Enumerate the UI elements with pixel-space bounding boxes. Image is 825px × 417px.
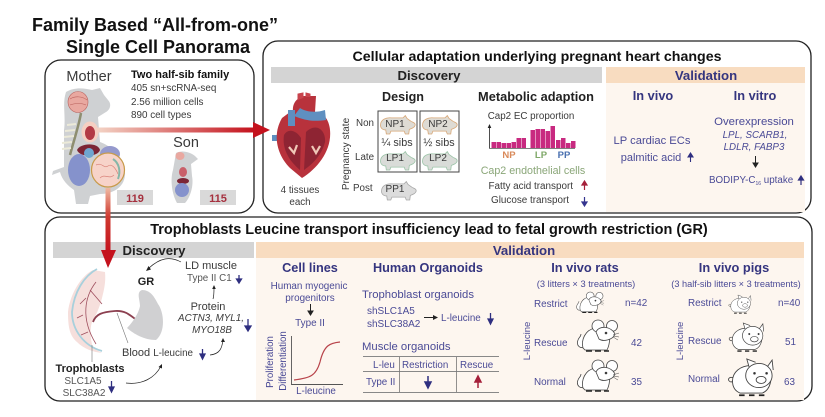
icon: small rat xyxy=(577,292,604,312)
trophoblasts gene list: Trophoblasts xyxy=(55,363,125,375)
table: muscle organoids: Rescue xyxy=(460,360,494,371)
in vivo rats: Rescue xyxy=(534,338,568,349)
heart caption: each xyxy=(289,197,311,208)
title xyxy=(32,15,278,57)
cell lines: Cell lines xyxy=(282,261,338,275)
design boxes xyxy=(378,111,459,172)
cell lines: progenitors xyxy=(285,293,335,304)
in vivo pigs: L-leucine xyxy=(675,322,686,360)
human organoids: Human Organoids xyxy=(373,261,483,275)
blood L-leucine: Blood L-leucine xyxy=(122,347,194,359)
family stats: 405 sn+scRNA-seq xyxy=(131,83,216,94)
family stats: Two half-sib family xyxy=(131,69,230,81)
in vitro result: uptake xyxy=(761,175,794,186)
panel: cellular adaptation xyxy=(263,41,811,213)
axis labels: Proliferation xyxy=(265,336,276,388)
human organoids xyxy=(362,261,499,392)
in vivo rats: (3 litters × 3 treatments) xyxy=(537,279,635,289)
in vivo rats: 35 xyxy=(631,377,642,388)
family stats xyxy=(131,69,230,121)
axis labels: Differentiation xyxy=(278,331,289,391)
validation background xyxy=(256,258,804,400)
pig LP1: LP1 xyxy=(386,153,404,164)
validation bar: Validation xyxy=(493,243,555,258)
in vivo pigs: Normal xyxy=(688,374,720,385)
protein: ACTN3, MYL1, xyxy=(177,313,244,324)
discovery bar: Discovery xyxy=(397,68,461,83)
mother anatomy figure xyxy=(52,88,125,204)
human organoids: Muscle organoids xyxy=(362,341,451,353)
pig LP2: LP2 xyxy=(429,153,447,164)
arrow: mother to trophoblast panel xyxy=(101,188,116,268)
bar chart: Cap2 EC proportion xyxy=(488,111,576,161)
row labels xyxy=(353,118,375,194)
row labels: Post xyxy=(353,183,373,194)
heading: metabolic adaption: Metabolic adaption xyxy=(478,89,594,104)
arrow: mother to heart panel xyxy=(98,122,270,138)
axis label: pregnancy state: Pregnancy state xyxy=(341,117,352,190)
LD muscle: Type II C1 xyxy=(187,273,232,284)
family stats: 890 cell types xyxy=(131,110,191,121)
in vitro result: LPL, SCARB1, xyxy=(723,130,787,141)
protein: Protein xyxy=(191,301,225,313)
in vivo result xyxy=(614,135,693,164)
in vivo pigs: In vivo pigs xyxy=(699,260,769,275)
table: muscle organoids: Type II xyxy=(366,377,395,388)
in vitro result: Overexpression xyxy=(714,116,794,128)
discovery bar: Discovery xyxy=(122,243,186,258)
cell lines xyxy=(265,261,347,397)
placenta and fetus illustration xyxy=(68,269,163,362)
in vivo pigs: 63 xyxy=(784,377,795,388)
icon: medium rat xyxy=(577,320,619,351)
icon: up arrow xyxy=(582,181,587,190)
pig PP1: PP1 xyxy=(386,184,405,195)
son anatomy figure xyxy=(172,152,198,203)
icon: large pig xyxy=(728,359,773,395)
pig NP1 xyxy=(380,116,415,134)
in vivo rats xyxy=(522,260,647,391)
icon: heart xyxy=(272,93,330,178)
title: Single Cell Panorama xyxy=(66,37,251,57)
in vivo rats: 42 xyxy=(631,338,642,349)
in vitro result xyxy=(709,116,804,187)
count: mother 119: 119 xyxy=(126,193,144,205)
trophoblasts gene list: SLC38A2 xyxy=(63,388,106,399)
title: Family Based “All-from-one” xyxy=(32,15,278,35)
in vivo pigs: 51 xyxy=(785,337,796,348)
in vivo rats: In vivo rats xyxy=(551,260,619,275)
panel heading: Cellular adaptation underlying pregnant heart changes xyxy=(353,49,722,65)
count: son 115 xyxy=(200,190,236,205)
heading: in vivo: In vivo xyxy=(633,88,673,103)
validation bar xyxy=(606,67,805,83)
LD muscle: LD muscle xyxy=(185,260,237,272)
table: muscle organoids: L-leu xyxy=(373,360,395,371)
discovery bar xyxy=(53,242,254,258)
in vitro result: 16 xyxy=(755,181,761,187)
human organoids: Trophoblast organoids xyxy=(362,289,474,301)
icon: medium pig xyxy=(729,323,764,351)
protein: MYO18B xyxy=(192,325,232,336)
in vivo result: palmitic acid xyxy=(621,152,681,164)
cell lines: Human myogenic xyxy=(271,281,347,292)
pig PP1 xyxy=(381,182,416,200)
Cap2 endothelial cells: Cap2 endothelial cells xyxy=(481,165,585,177)
count: son 115: 115 xyxy=(209,193,227,205)
in vivo pigs: Rescue xyxy=(688,336,722,347)
bar chart: Cap2 EC proportion: NP xyxy=(502,150,516,161)
in vivo rats: Normal xyxy=(534,377,566,388)
sigmoid chart xyxy=(292,336,343,384)
bar chart: Cap2 EC proportion: LP xyxy=(535,150,548,161)
cell lines: L-leucine xyxy=(296,386,336,397)
sibs labels: ½ sibs xyxy=(423,137,455,149)
in vivo rats: L-leucine xyxy=(522,322,533,360)
icon: small pig xyxy=(729,295,751,313)
LD muscle xyxy=(146,259,242,284)
row labels: Late xyxy=(355,152,375,163)
trophoblasts gene list: SLC1A5 xyxy=(64,376,102,387)
heading: in vitro: In vitro xyxy=(734,88,777,103)
GR label: GR xyxy=(138,276,154,288)
human organoids: shSLC1A5 xyxy=(367,306,415,317)
cell lines: Type II xyxy=(295,318,325,329)
validation bar: Validation xyxy=(675,68,737,83)
in vivo rats: Restrict xyxy=(534,299,568,310)
axis labels xyxy=(265,331,289,391)
panel: family overview xyxy=(45,60,254,213)
discovery bar xyxy=(271,67,602,83)
trophoblasts gene list xyxy=(55,363,162,399)
pig LP2 xyxy=(422,152,457,170)
row labels: Non xyxy=(356,118,374,129)
protein xyxy=(177,285,251,336)
in vitro result: LDLR, FABP3 xyxy=(724,142,785,153)
Cap2 endothelial cells xyxy=(481,165,587,206)
Cap2 endothelial cells: Fatty acid transport xyxy=(488,181,573,192)
validation bar xyxy=(256,242,804,258)
validation background xyxy=(606,83,805,212)
count: mother 119 xyxy=(117,190,153,205)
table: muscle organoids: Restriction xyxy=(402,360,448,371)
mother label: Mother xyxy=(66,69,112,85)
icon: down arrow xyxy=(582,197,587,206)
bar chart: Cap2 EC proportion: Cap2 EC proportion xyxy=(488,111,574,122)
Cap2 endothelial cells: Glucose transport xyxy=(491,195,569,206)
in vivo rats: n=42 xyxy=(625,298,647,309)
heart caption xyxy=(281,185,319,208)
in vivo pigs: Restrict xyxy=(688,298,722,309)
pig NP2 xyxy=(422,116,457,134)
bar chart: Cap2 EC proportion: PP xyxy=(558,150,571,161)
sibs labels xyxy=(381,137,455,149)
human organoids: L-leucine xyxy=(441,313,481,324)
heading: design: Design xyxy=(382,90,424,104)
blood L-leucine xyxy=(122,338,225,359)
table: muscle organoids xyxy=(363,356,499,392)
in vivo result: LP cardiac ECs xyxy=(614,135,691,147)
in vitro result: BODIPY-C xyxy=(709,175,755,186)
sibs labels: ¼ sibs xyxy=(381,137,413,149)
panel heading: Trophoblasts Leucine transport insufficiency lead to fetal growth restriction (GR) xyxy=(150,222,708,238)
in vivo pigs xyxy=(671,260,801,395)
in vivo pigs: (3 half-sib litters × 3 treatments) xyxy=(671,279,801,289)
panel: trophoblasts xyxy=(45,217,812,401)
pig NP1: NP1 xyxy=(385,119,405,130)
pig LP1 xyxy=(380,152,415,170)
icon: large rat xyxy=(577,360,619,391)
family stats: 2.56 million cells xyxy=(131,97,204,108)
son label: Son xyxy=(173,135,199,151)
human organoids: shSLC38A2 xyxy=(367,319,421,330)
pig NP2: NP2 xyxy=(428,119,448,130)
heart caption: 4 tissues xyxy=(281,185,319,196)
in vivo pigs: n=40 xyxy=(778,298,801,309)
